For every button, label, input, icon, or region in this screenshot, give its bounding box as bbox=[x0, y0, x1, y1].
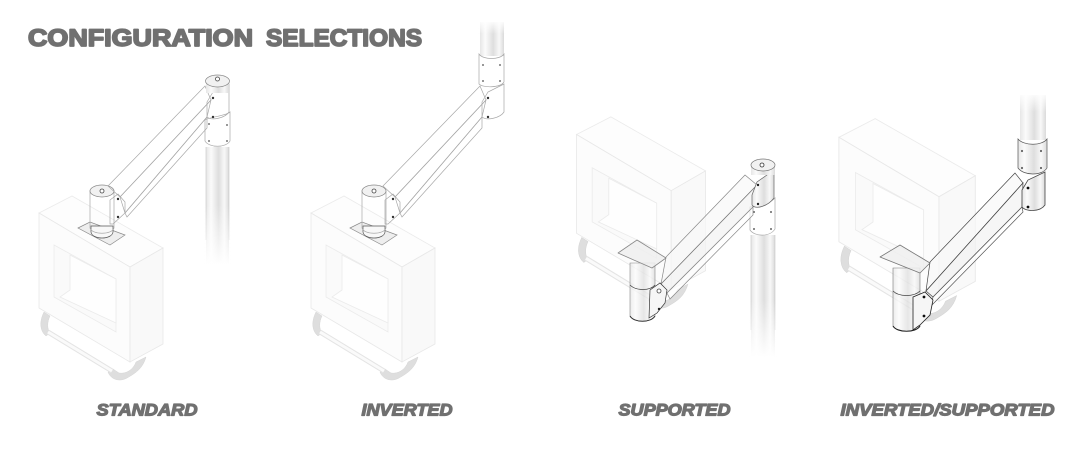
collar: inverted/supported bbox=[1018, 139, 1047, 174]
arm: supported bbox=[661, 175, 757, 299]
configuration: inverted/supported bbox=[839, 92, 1048, 331]
pole: inverted/supported bbox=[1018, 92, 1048, 140]
collar: inverted bbox=[479, 54, 504, 87]
lower column: inverted bbox=[350, 185, 397, 245]
mounting plate: inverted/supported bbox=[880, 245, 930, 273]
upper joint: inverted/supported bbox=[1022, 172, 1045, 211]
top cap: standard bbox=[206, 75, 230, 93]
title bbox=[28, 25, 422, 52]
lower joint: supported bbox=[649, 283, 667, 318]
label: inverted: INVERTED bbox=[362, 402, 453, 420]
configuration: standard bbox=[39, 75, 231, 380]
collar: standard bbox=[205, 112, 230, 146]
lower column: standard bbox=[78, 185, 125, 245]
monitor: inverted/supported bbox=[839, 119, 975, 321]
arm: standard bbox=[108, 84, 229, 224]
pole: inverted bbox=[478, 20, 506, 56]
monitor: inverted bbox=[311, 196, 435, 380]
pole: standard bbox=[204, 147, 231, 265]
label: supported: SUPPORTED bbox=[618, 402, 731, 420]
label: standard: STANDARD bbox=[96, 402, 198, 420]
title: CONFIGURATION bbox=[28, 25, 253, 52]
lower column: supported bbox=[630, 263, 655, 321]
upper joint: supported bbox=[751, 159, 775, 207]
pole: supported bbox=[749, 235, 777, 357]
collar: supported bbox=[750, 198, 775, 235]
monitor: supported bbox=[577, 117, 706, 308]
arm: inverted/supported bbox=[926, 173, 1023, 306]
label: inverted/supported: INVERTED/SUPPORTED bbox=[840, 402, 1055, 420]
configuration: inverted bbox=[311, 20, 506, 380]
monitor: standard bbox=[39, 196, 163, 380]
lower joint: inverted/supported bbox=[913, 292, 933, 330]
lower column: inverted/supported bbox=[893, 268, 920, 331]
arm: inverted bbox=[383, 84, 504, 224]
title: SELECTIONS bbox=[266, 25, 422, 52]
configuration: supported bbox=[577, 117, 777, 357]
mounting plate: supported bbox=[618, 240, 666, 268]
